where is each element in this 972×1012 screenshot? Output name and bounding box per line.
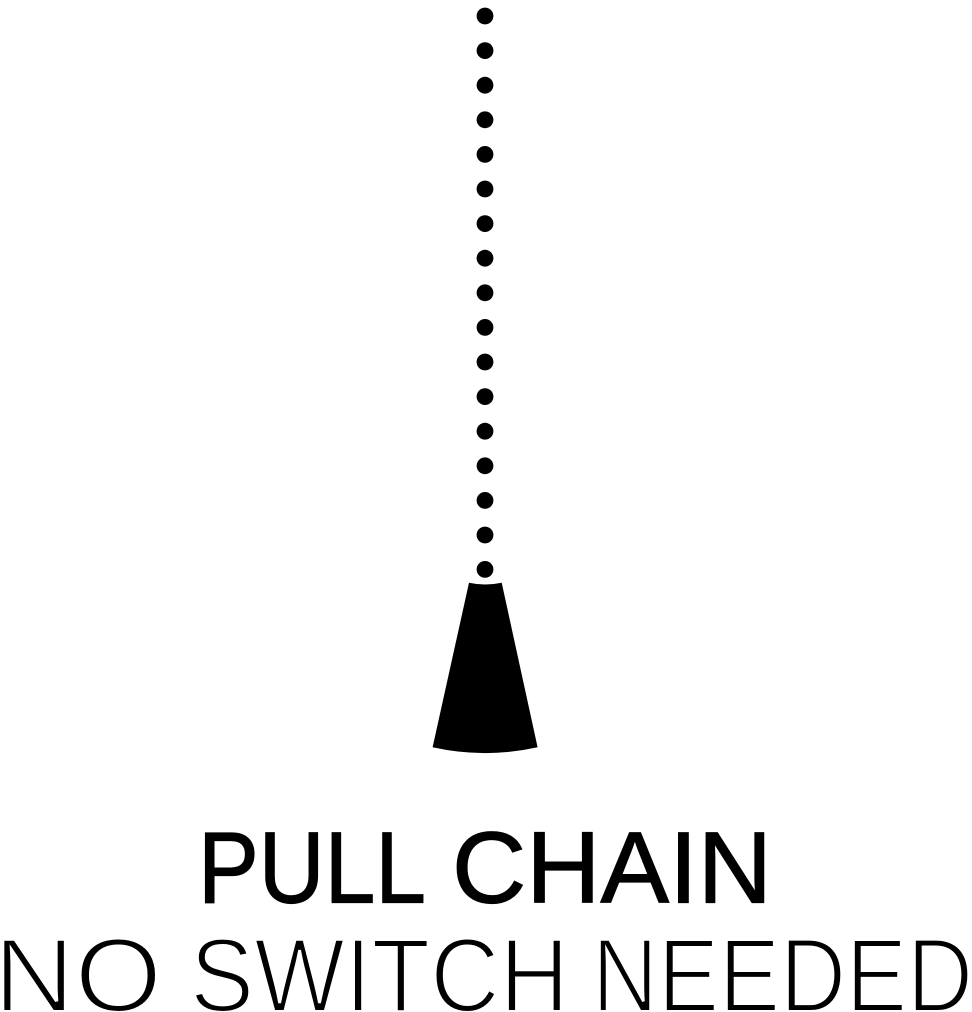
heading: pull chain: PULL	[198, 812, 426, 924]
icon: beaded chain	[477, 8, 493, 578]
heading: pull chain: CHAIN	[452, 812, 772, 924]
subheading: no switch needed	[0, 918, 972, 1012]
icon: chain pull weight	[433, 583, 538, 753]
heading: pull chain	[198, 812, 772, 924]
